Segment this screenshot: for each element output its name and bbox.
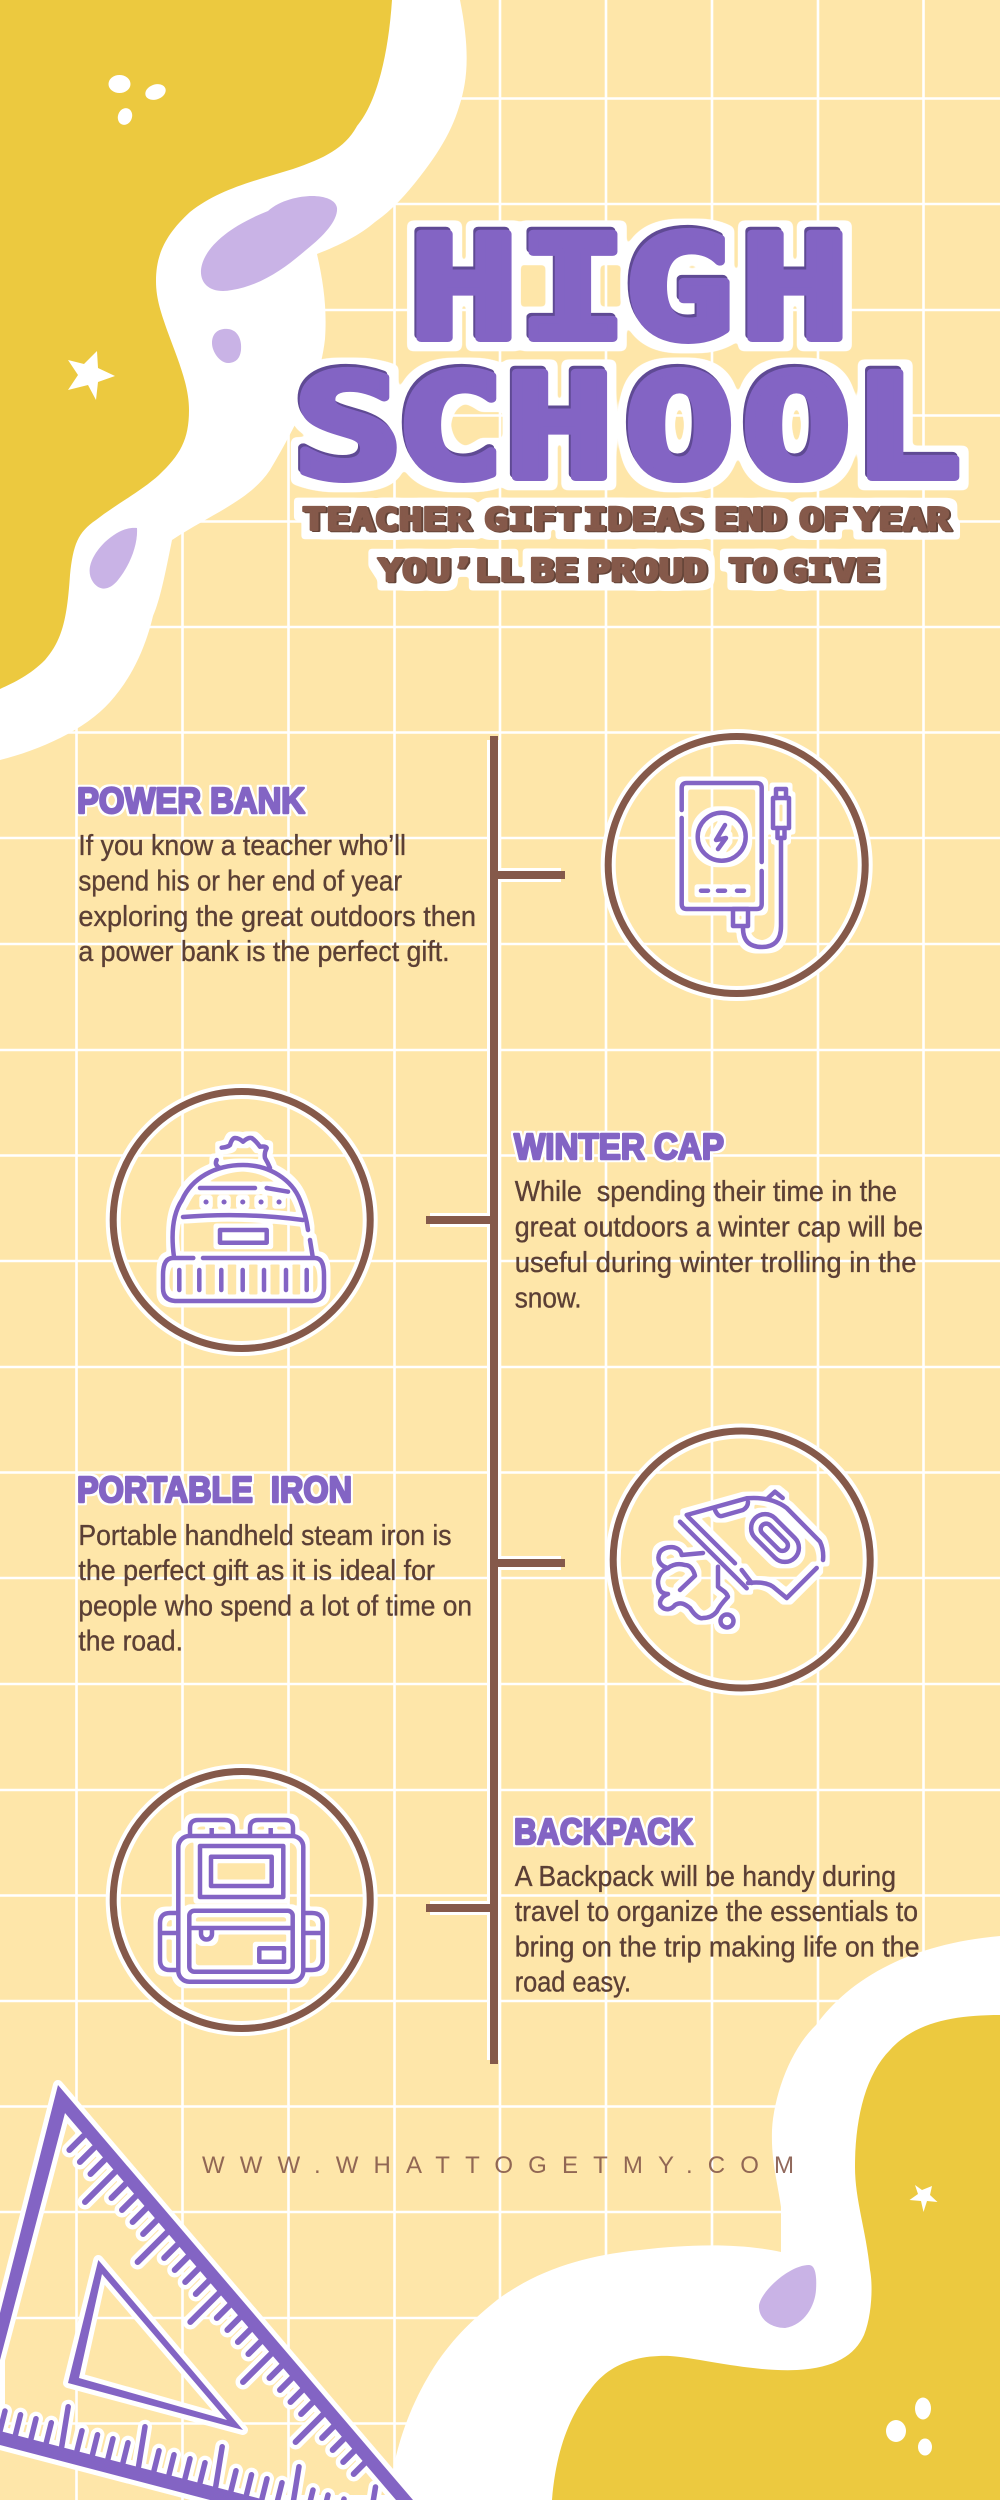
subtitle: END bbox=[714, 502, 786, 538]
text: backpack description: travel to organize the essentials to bbox=[515, 1896, 918, 1928]
heading: portable iron: PORTABLE IRON bbox=[77, 1469, 352, 1510]
website footer: WWW.WHATTOGETMY.COM bbox=[202, 2152, 794, 2179]
text: power bank description: If you know a teacher who’ll bbox=[78, 830, 406, 862]
subtitle: TO bbox=[728, 553, 776, 589]
text: winter cap description bbox=[515, 1176, 923, 1314]
icon circle: power bank bbox=[608, 736, 865, 994]
text: winter cap description: snow. bbox=[515, 1282, 582, 1314]
icon circle: winter cap bbox=[113, 1092, 370, 1348]
text: winter cap description: While spending their time in the bbox=[515, 1176, 897, 1208]
icon: backpack bbox=[160, 1820, 323, 1982]
subtitle: YEAR bbox=[854, 502, 951, 538]
heading: backpack: BACKPACK bbox=[514, 1811, 693, 1852]
heading: power bank: POWER BANK bbox=[77, 780, 305, 821]
subtitle: PROUD bbox=[586, 553, 707, 589]
inner triangle cut-out bbox=[68, 2260, 243, 2430]
text: portable iron description: people who spend a lot of time on bbox=[78, 1591, 472, 1623]
text: backpack description bbox=[515, 1861, 920, 1998]
subtitle bbox=[302, 502, 951, 589]
text: power bank description: exploring the great outdoors then bbox=[78, 901, 476, 933]
text: portable iron description bbox=[78, 1520, 472, 1657]
panel: winter cap bbox=[113, 1092, 923, 1348]
subtitle: BE bbox=[530, 553, 578, 589]
text: backpack description: bring on the trip making life on the bbox=[515, 1932, 920, 1964]
subtitle: OF bbox=[799, 502, 847, 538]
ruler base ticks bbox=[0, 2407, 376, 2500]
text: portable iron description: the road. bbox=[78, 1625, 183, 1657]
title: High School: SCHOOL bbox=[293, 344, 962, 511]
text: winter cap description: great outdoors a winter cap will be bbox=[515, 1212, 923, 1244]
subtitle: TEACHER bbox=[302, 502, 471, 538]
title: High School bbox=[293, 205, 962, 511]
subtitle: IDEAS bbox=[583, 502, 703, 538]
ruler hypotenuse ticks bbox=[69, 2136, 368, 2474]
icon: iron bbox=[658, 1492, 823, 1628]
title: High School: HIGH bbox=[409, 205, 850, 372]
subtitle: GIVE bbox=[783, 553, 879, 589]
heading: winter cap: WINTER CAP bbox=[514, 1126, 724, 1167]
text: backpack description: road easy. bbox=[515, 1966, 631, 1998]
text: portable iron description: the perfect gift as it is ideal for bbox=[78, 1555, 435, 1587]
icon: winter cap bbox=[163, 1138, 324, 1301]
panel: power bank bbox=[77, 736, 865, 994]
ruler frame outline bbox=[0, 2085, 413, 2500]
timeline spine with connector arrows bbox=[426, 736, 565, 2064]
text: backpack description: A Backpack will be handy during bbox=[515, 1861, 896, 1893]
subtitle: YOU’LL bbox=[378, 553, 522, 589]
top left blob decoration bbox=[0, 0, 467, 760]
bottom right blob decoration bbox=[389, 1936, 1000, 2500]
subtitle: GIFT bbox=[484, 502, 580, 538]
icon: power bank bbox=[682, 783, 789, 947]
text: power bank description: a power bank is the perfect gift. bbox=[78, 936, 450, 968]
icon circle: backpack bbox=[113, 1772, 370, 2028]
text: power bank description: spend his or her end of year bbox=[78, 866, 402, 898]
set square ruler illustration bbox=[0, 2085, 413, 2500]
text: winter cap description: useful during winter trolling in the bbox=[515, 1247, 916, 1279]
text: portable iron description: Portable handheld steam iron is bbox=[78, 1520, 452, 1552]
panel: backpack bbox=[113, 1772, 920, 2028]
panel: portable iron bbox=[77, 1431, 870, 1688]
icon circle: portable iron bbox=[613, 1431, 870, 1688]
text: power bank description bbox=[78, 830, 476, 968]
ruler frame fill bbox=[0, 2085, 413, 2500]
